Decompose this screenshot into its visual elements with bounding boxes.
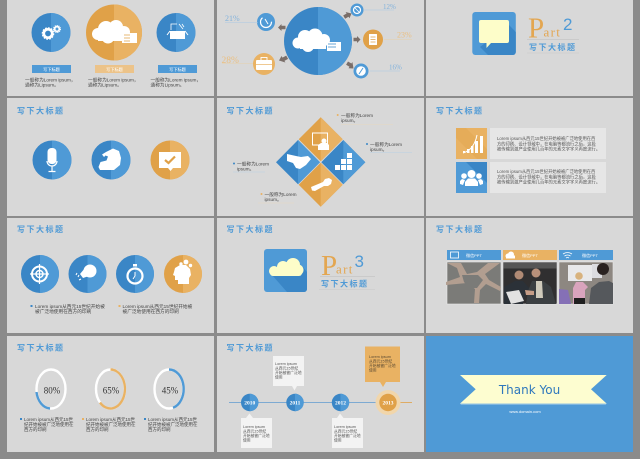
note: 65%: 西方的印刷 bbox=[86, 426, 109, 433]
chart: ring 80%: 80% bbox=[44, 386, 61, 396]
callout: 2011: Lorem ipsum bbox=[275, 362, 297, 366]
node: 2011: 2011 bbox=[290, 400, 301, 406]
button: blue heading bbox=[32, 65, 71, 73]
button: blue heading: 写下标题 bbox=[169, 66, 187, 73]
node: 2013: 2013 bbox=[382, 400, 394, 406]
heading: 写下大标题 bbox=[17, 342, 64, 352]
callout: 2013: Lorem ipsum bbox=[369, 355, 391, 359]
callout: 2010: 开始被被广泛地 bbox=[243, 433, 270, 438]
icon: box with signal bbox=[156, 13, 196, 52]
label: bottom: 一般称为Lorem bbox=[264, 191, 297, 198]
label: top: 一般称为Lorem bbox=[341, 112, 373, 119]
photo: hands star bbox=[446, 262, 501, 304]
label: 23% bbox=[384, 30, 412, 40]
tab: screen: 微信PPT bbox=[466, 252, 482, 258]
row: growth chart: 被传输到激产业使用几百年的元素文字字义再度流行。 bbox=[497, 146, 600, 153]
node: 2013 bbox=[376, 390, 400, 415]
chart: ring 65% bbox=[96, 370, 125, 408]
note: 45%: 纪开始被被广泛地使用在 bbox=[148, 421, 198, 428]
note: 45% bbox=[144, 416, 198, 433]
note: 80% bbox=[20, 416, 74, 433]
note: 80%: 西方的印刷 bbox=[24, 426, 47, 433]
website: www.domain.com bbox=[509, 409, 541, 414]
heading: 写下大标题 bbox=[226, 342, 274, 352]
panel: progress rings bbox=[7, 336, 214, 452]
icon: small badge 12% bbox=[350, 4, 364, 16]
row: growth chart bbox=[456, 128, 606, 159]
chart: ring 65%: 65% bbox=[103, 386, 120, 396]
icon: briefcase 28% bbox=[253, 53, 275, 75]
icon: key diamond bbox=[299, 163, 343, 207]
icon: light bulb bbox=[68, 255, 106, 293]
text block: 一般称为Lorem ipsum， bbox=[88, 76, 139, 84]
arrow: to clipboard bbox=[354, 36, 360, 43]
label: left: 一般称为Lorem bbox=[237, 160, 269, 167]
note: 45%: 西方的印刷 bbox=[148, 426, 171, 433]
icon: microphone bbox=[32, 140, 72, 180]
panel: voice strength check icons bbox=[7, 98, 214, 216]
text block: 通称为Lipsum。 bbox=[88, 82, 122, 88]
text block: 通称为Lipsum。 bbox=[150, 82, 184, 88]
tab: cloud: 微信PPT bbox=[522, 252, 538, 258]
icon: handshake diamond bbox=[276, 140, 320, 184]
callout: 2013: 使用 bbox=[369, 368, 377, 372]
text block: 一般称为Lorem ipsum， bbox=[25, 76, 76, 84]
callout: 2012: Lorem ipsum bbox=[334, 425, 356, 429]
icon: cloud tile bbox=[264, 249, 307, 292]
label: right: 一般称为Lorem bbox=[370, 141, 402, 148]
heading: Part 2: 2 bbox=[563, 15, 572, 34]
note: 80%: Lorem ipsum从西元15世 bbox=[24, 416, 74, 423]
arrow: to briefcase bbox=[279, 56, 288, 62]
note: left: 被广泛地使用在西方的印刷 bbox=[35, 308, 92, 315]
note: right: Lorem ipsum从西元15世纪开始被 bbox=[122, 303, 193, 310]
ribbon banner bbox=[460, 375, 607, 405]
label: bottom: ipsum。 bbox=[264, 197, 282, 202]
panel: timeline bbox=[217, 336, 424, 452]
callout: 2010 bbox=[241, 414, 272, 448]
timeline axis bbox=[229, 402, 412, 404]
arrow: to small badge bbox=[343, 12, 352, 19]
text block: 一般称为Lorem ipsum， bbox=[150, 76, 201, 84]
icon: teacher diamond bbox=[299, 117, 343, 161]
chart: ring 80% bbox=[36, 370, 66, 408]
label: 28%: 28% bbox=[222, 56, 239, 66]
heading: Part 3: P bbox=[321, 250, 337, 282]
icon: flexed arm bbox=[92, 140, 130, 180]
heading: Part 3: art bbox=[336, 262, 354, 276]
callout: 2013: 从西元15世纪 bbox=[369, 358, 392, 364]
heading: 写下大标题 bbox=[226, 224, 274, 234]
note: right: 被广泛地使用在西方的印刷 bbox=[122, 308, 179, 315]
label: right bbox=[366, 141, 412, 152]
panel: part 3 bbox=[217, 218, 424, 333]
label: left: ipsum。 bbox=[237, 166, 254, 172]
heading: Part 3: 3 bbox=[354, 252, 364, 271]
button: blue heading: 写下标题 bbox=[43, 66, 61, 73]
note: 65%: Lorem ipsum从西元15世 bbox=[86, 416, 136, 423]
row: growth chart: 方的印刷、设计领域中，在电脑等都流行之后，这段 bbox=[497, 140, 597, 147]
label: 16% bbox=[370, 64, 402, 72]
icon: check bubble bbox=[150, 140, 190, 180]
note: left bbox=[30, 303, 105, 315]
label: top bbox=[337, 112, 393, 124]
button: orange heading: 写下标题 bbox=[106, 66, 124, 73]
panel: chart and people rows bbox=[426, 98, 633, 216]
panel: four icons with notes bbox=[7, 218, 214, 333]
node: 2012 bbox=[332, 394, 349, 411]
heading: 写下大标题 bbox=[436, 224, 484, 234]
icon: percent badge 16% bbox=[354, 64, 368, 78]
row: people: Lorem ipsum从西元15世纪开始被被广泛地使用在西 bbox=[497, 168, 596, 175]
row: people: 方的印刷、设计领域中，在电脑等都流行之后，这段 bbox=[497, 173, 597, 180]
text block: 通称为Lipsum。 bbox=[25, 82, 59, 88]
icon: clipboard 23% bbox=[363, 30, 383, 50]
icon: gauge 21% bbox=[257, 13, 275, 31]
label: 12%: 12% bbox=[383, 3, 396, 11]
icon: target bbox=[21, 255, 59, 293]
heading: 写下大标题 bbox=[226, 106, 274, 116]
node: 2010: 2010 bbox=[244, 400, 255, 406]
node: 2012: 2012 bbox=[335, 400, 346, 406]
heading: 写下大标题 bbox=[436, 106, 484, 116]
tab: cloud bbox=[503, 250, 557, 260]
heading: 写下大标题 bbox=[17, 224, 64, 234]
heading: Part 2: P bbox=[528, 12, 544, 44]
chart: ring 45%: 45% bbox=[162, 386, 179, 396]
tab: wifi bbox=[559, 250, 613, 260]
icon: stopwatch bbox=[116, 255, 154, 293]
heading: 写下大标题 bbox=[17, 106, 64, 116]
callout: 2010: 使用 bbox=[243, 438, 251, 442]
note: 80%: 纪开始被被广泛地使用在 bbox=[24, 421, 74, 428]
icon: speech bubble bbox=[472, 12, 516, 55]
tab: screen bbox=[447, 250, 501, 260]
label: 21% bbox=[225, 14, 258, 23]
callout: 2012 bbox=[332, 414, 363, 448]
callout: 2013 bbox=[365, 346, 400, 387]
panel: part 2 bbox=[426, 0, 633, 96]
label: left bbox=[233, 160, 269, 172]
arrow: to percent badge bbox=[346, 62, 354, 68]
icon: head with gears bbox=[164, 255, 202, 293]
callout: 2013: 开始被被广泛地 bbox=[369, 363, 396, 368]
row: people: 被传输到激产业使用几百年的元素文字字义再度流行。 bbox=[497, 179, 600, 186]
label: right: ipsum。 bbox=[370, 147, 387, 152]
callout: 2012: 使用 bbox=[334, 438, 342, 442]
chart: ring 45% bbox=[154, 369, 184, 408]
label: 23%: 23% bbox=[397, 30, 412, 40]
icon: cloud with building bbox=[86, 4, 142, 60]
note: 65% bbox=[82, 416, 136, 433]
arrow: to gauge bbox=[278, 24, 286, 31]
label: 21%: 21% bbox=[225, 14, 240, 23]
tab: wifi: 微信PPT bbox=[582, 252, 598, 258]
callout: 2011: 开始被被广泛地 bbox=[275, 370, 302, 375]
note: 65%: 纪开始被被广泛地使用在 bbox=[86, 421, 136, 428]
note: left: Lorem ipsum从西元15世纪开始被 bbox=[35, 303, 105, 310]
label: top: ipsum。 bbox=[341, 118, 358, 123]
label: 28% bbox=[222, 56, 253, 66]
panel: photo gallery bbox=[426, 218, 633, 333]
icon: gears bbox=[32, 13, 70, 52]
callout: 2011: 从西元15世纪 bbox=[275, 366, 298, 370]
panel: thank you bbox=[426, 336, 633, 452]
row: people bbox=[456, 162, 606, 193]
heading: Part 2: 写下大标题 bbox=[529, 42, 576, 52]
callout: 2010: 从西元15世纪 bbox=[243, 428, 266, 434]
button: orange heading bbox=[95, 65, 134, 73]
node: 2011 bbox=[286, 394, 304, 411]
photo: businessmen handshake bbox=[503, 262, 557, 304]
heading: Part 2 bbox=[527, 12, 579, 53]
icon: stairs diamond bbox=[321, 140, 365, 184]
note: right bbox=[118, 303, 193, 315]
heading: Part 3: 写下大标题 bbox=[321, 278, 368, 288]
label: 16%: 16% bbox=[389, 64, 402, 72]
callout: 2010: Lorem ipsum bbox=[243, 425, 265, 429]
panel: cloud percentages bbox=[217, 0, 424, 96]
photo: meeting presentation bbox=[559, 262, 613, 304]
callout: 2011: 使用 bbox=[275, 374, 283, 380]
label: bottom bbox=[258, 191, 297, 203]
callout: 2011 bbox=[273, 356, 304, 390]
node: 2010 bbox=[241, 394, 258, 411]
callout: 2012: 开始被被广泛地 bbox=[334, 433, 361, 438]
ribbon banner: Thank You bbox=[498, 383, 560, 397]
heading: Part 2: art bbox=[544, 24, 561, 40]
note: 45%: Lorem ipsum从西元15世 bbox=[148, 416, 198, 423]
row: growth chart: Lorem ipsum从西元15世纪开始被被广泛地使用在西 bbox=[497, 135, 596, 142]
button: blue heading bbox=[158, 65, 197, 73]
panel: diamonds bbox=[217, 98, 424, 216]
panel: three icon cards bbox=[7, 0, 214, 96]
label: 12% bbox=[364, 3, 396, 11]
heading: Part 3 bbox=[319, 250, 375, 290]
icon: central cloud bbox=[284, 7, 352, 75]
callout: 2012: 从西元15世纪 bbox=[334, 428, 357, 434]
